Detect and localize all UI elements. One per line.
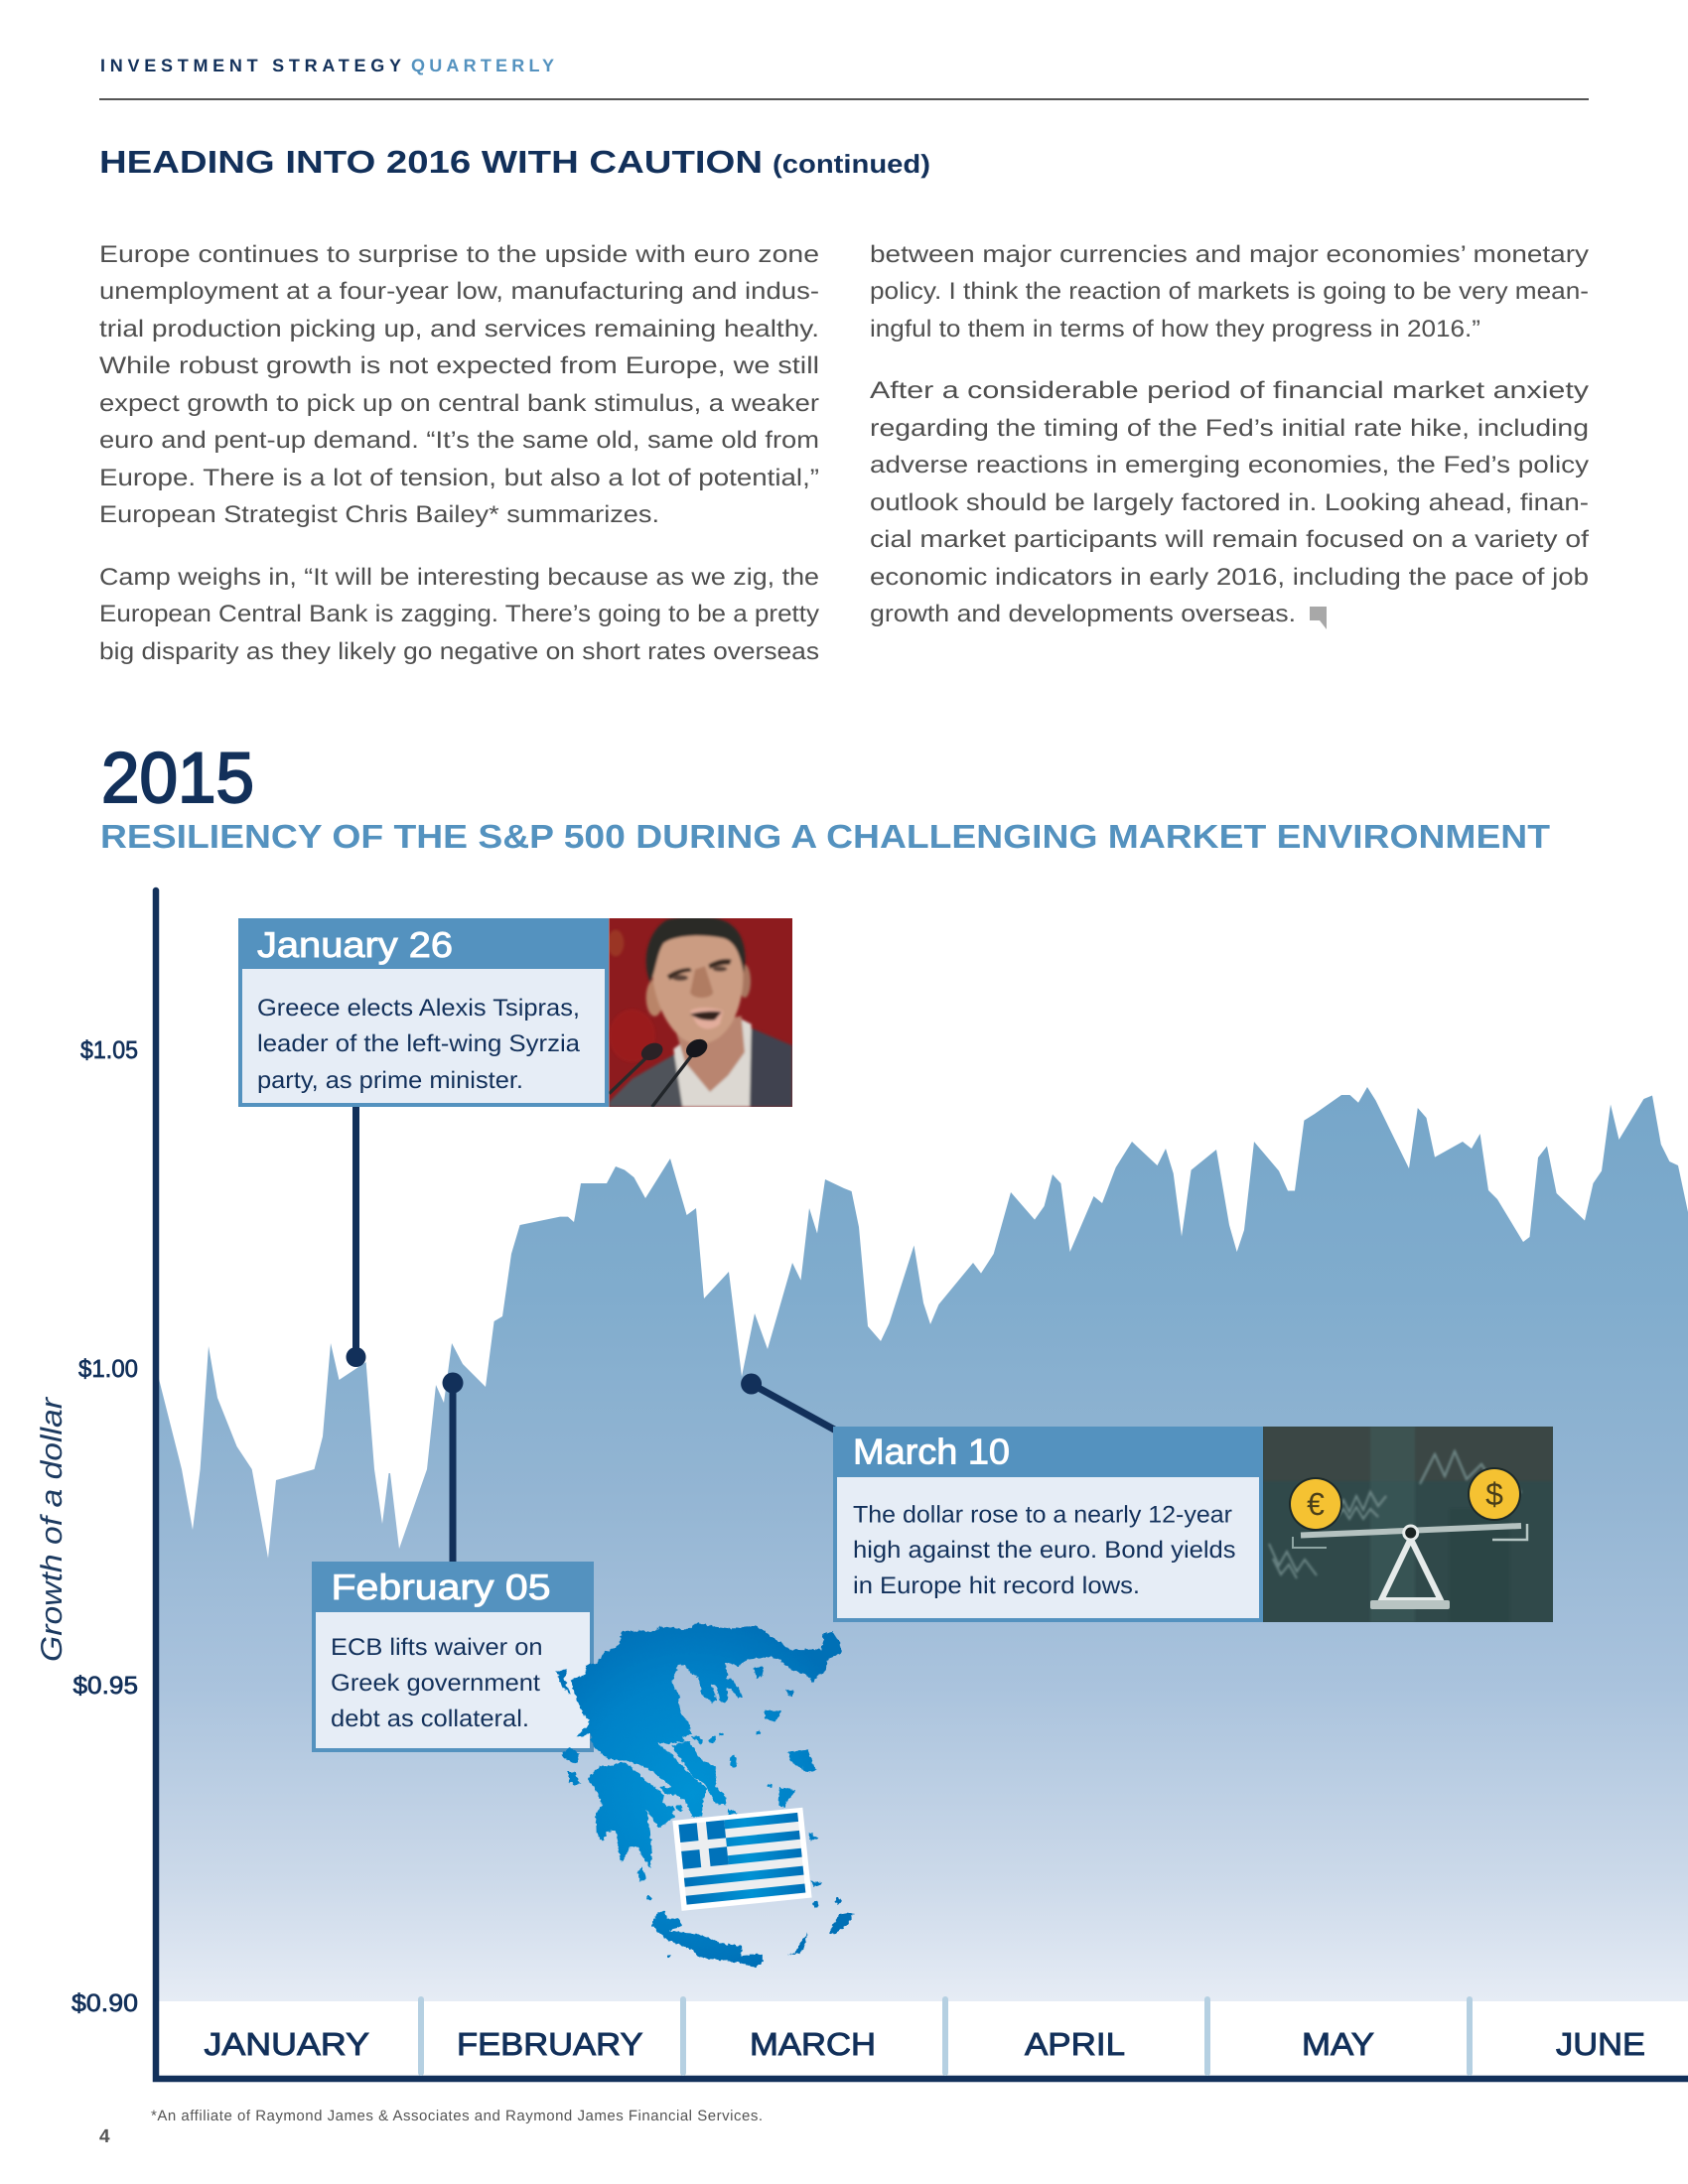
- text block: left column: Europe. There is a lot of tension, but also a lot of potential,”: [99, 465, 819, 491]
- month axis: [205, 1996, 1645, 2076]
- leader line: February 05: [443, 1372, 463, 1564]
- text block: right column: economic indicators in early 2016, including the pace of job: [870, 564, 1589, 591]
- icon: Greek flag: [672, 1808, 812, 1911]
- callout: February 05: debt as collateral.: [331, 1706, 529, 1732]
- image: euro and dollar balance: [1263, 1427, 1553, 1622]
- page header: QUARTERLY: [411, 56, 554, 75]
- text block: left column: European Central Bank is zagging. There’s going to be a pretty: [99, 601, 819, 627]
- callout: January 26: leader of the left-wing Syrzia: [257, 1030, 581, 1057]
- chart heading: 2015: 2015: [101, 739, 254, 818]
- leader line: March 10: [741, 1374, 836, 1431]
- y axis labels: $1.00: [78, 1355, 138, 1383]
- text block: right column: cial market participants will remain focused on a variety of: [870, 526, 1589, 553]
- text block: right column: ingful to them in terms of how they progress in 2016.”: [870, 316, 1480, 342]
- y axis labels: $0.90: [71, 1989, 138, 2017]
- text block: left column: While robust growth is not expected from Europe, we still: [99, 352, 819, 379]
- callout: February 05: Greek government: [331, 1670, 540, 1697]
- text block: right column: regarding the timing of the Fed’s initial rate hike, including: [870, 415, 1589, 442]
- page header: INVESTMENT STRATEGY: [100, 56, 401, 75]
- callout: March 10: in Europe hit record lows.: [853, 1572, 1140, 1599]
- page number: 4: [99, 2126, 110, 2147]
- callout: January 26: January 26: [257, 924, 453, 965]
- image: euro and dollar balance: €: [1307, 1486, 1325, 1522]
- callout: February 05: February 05: [332, 1567, 550, 1607]
- leader line: January 26: [346, 1107, 365, 1367]
- callout: March 10: The dollar rose to a nearly 12-year: [853, 1501, 1232, 1529]
- text block: right column: outlook should be largely factored in. Looking ahead, finan-: [870, 489, 1589, 516]
- month axis: FEBRUARY: [457, 2026, 643, 2062]
- text block: right column: growth and developments overseas.: [870, 601, 1296, 627]
- icon: map of Greece: [556, 1622, 854, 1968]
- y axis labels: $0.95: [73, 1672, 138, 1700]
- text block: left column: big disparity as they likely go negative on short rates overseas: [99, 638, 819, 665]
- callout: March 10: high against the euro. Bond yields: [853, 1537, 1236, 1564]
- callout: January 26: [238, 918, 609, 1107]
- y axis title: Growth of a dollar: [36, 1397, 69, 1662]
- icon: end mark: [1310, 607, 1327, 629]
- month axis: MAY: [1302, 2026, 1374, 2062]
- text block: right column: After a considerable period of financial market anxiety: [870, 377, 1589, 404]
- chart subheading: RESILIENCY OF THE S&P 500 DURING A CHALLENGING MARKET ENVIRONMENT: [100, 819, 1551, 856]
- month axis: MARCH: [750, 2026, 876, 2062]
- area chart: growth of a dollar: [159, 1087, 1688, 2001]
- title: HEADING INTO 2016 WITH CAUTION: [99, 144, 763, 180]
- text block: left column: unemployment at a four-year low, manufacturing and indus-: [99, 278, 819, 305]
- callout: March 10: [833, 1427, 1263, 1622]
- y axis labels: [71, 1036, 138, 2017]
- month axis: JANUARY: [205, 2026, 369, 2062]
- text block: left column: European Strategist Chris Bailey* summarizes.: [99, 501, 659, 528]
- callout: February 05: ECB lifts waiver on: [331, 1634, 542, 1661]
- text block: left column: Camp weighs in, “It will be interesting because as we zig, the: [99, 564, 819, 591]
- text block: right column: [870, 241, 1589, 627]
- page header: [99, 56, 1589, 100]
- footnote: *An affiliate of Raymond James & Associates and Raymond James Financial Services.: [151, 2108, 763, 2124]
- text block: right column: adverse reactions in emerging economies, the Fed’s policy: [870, 452, 1589, 478]
- month axis: JUNE: [1556, 2026, 1645, 2062]
- text block: left column: [99, 241, 819, 665]
- text block: left column: Europe continues to surprise to the upside with euro zone: [99, 241, 819, 268]
- title: (continued): [773, 149, 930, 179]
- month axis: APRIL: [1025, 2026, 1125, 2062]
- text block: left column: expect growth to pick up on central bank stimulus, a weaker: [99, 390, 819, 417]
- title: [99, 144, 930, 180]
- text block: left column: euro and pent-up demand. “It’s the same old, same old from: [99, 427, 819, 454]
- callout: March 10: March 10: [853, 1432, 1010, 1471]
- callout: January 26: Greece elects Alexis Tsipras,: [257, 995, 580, 1022]
- text block: right column: policy. I think the reaction of markets is going to be very mean-: [870, 278, 1589, 305]
- callout: January 26: party, as prime minister.: [257, 1067, 523, 1094]
- image: euro and dollar balance: $: [1485, 1476, 1503, 1512]
- y axis labels: $1.05: [80, 1036, 138, 1064]
- text block: left column: trial production picking up, and services remaining healthy.: [99, 316, 819, 342]
- chart axes: [156, 890, 1688, 2079]
- photo: Alexis Tsipras: [608, 916, 792, 1107]
- text block: right column: between major currencies and major economies’ monetary: [870, 241, 1589, 268]
- callout: February 05: [312, 1562, 594, 1752]
